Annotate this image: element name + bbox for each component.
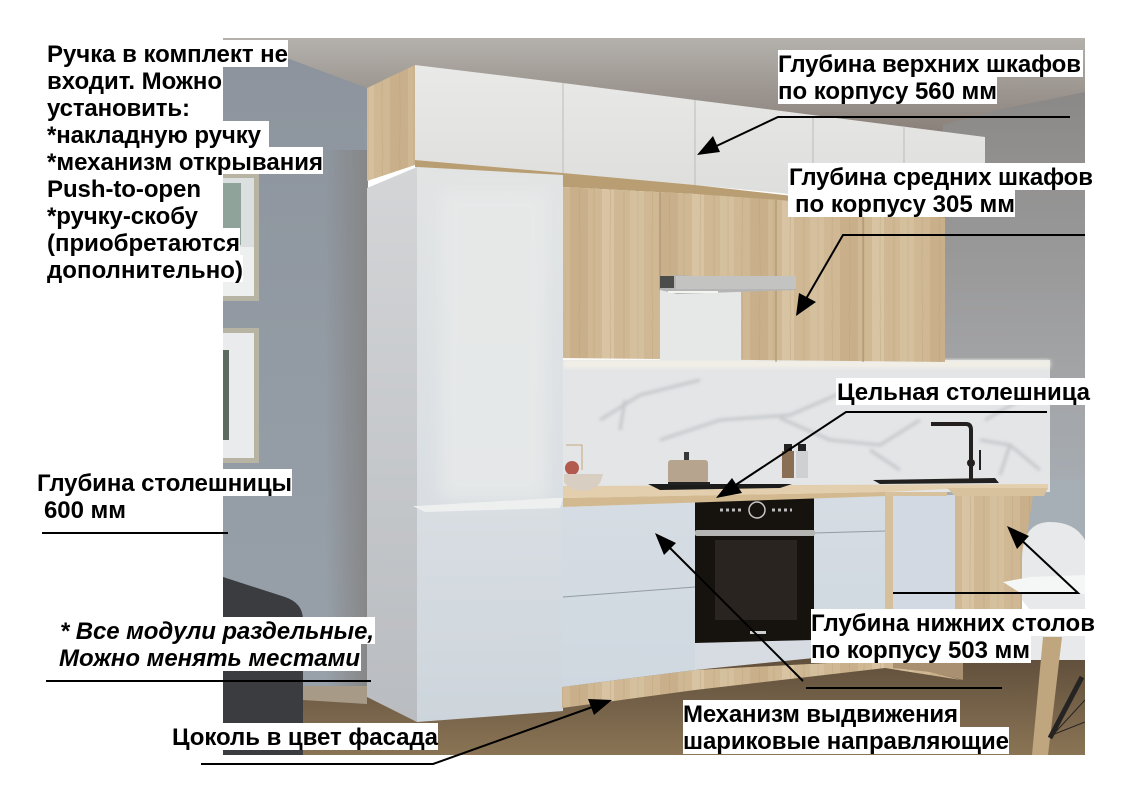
label: upper cabinets depth: по корпусу 560 мм — [778, 78, 997, 105]
label: worktop depth: Глубина столешницы — [37, 470, 292, 497]
wall corner shadow — [335, 150, 368, 686]
arrow: worktop — [716, 412, 1047, 498]
peninsula wood strip — [885, 492, 893, 610]
fridge side — [367, 167, 417, 722]
label: handle note: (приобретаются — [47, 230, 240, 257]
arrow: drawer runners — [655, 533, 1002, 688]
fridge front — [413, 167, 563, 722]
label: middle cabinets depth: по корпусу 305 мм — [795, 191, 1015, 218]
arrow: upper cabinets — [697, 117, 1070, 155]
oven — [695, 496, 815, 643]
hood recess with marble — [660, 288, 741, 360]
line: worktop depth — [42, 532, 228, 534]
cooker hood — [660, 275, 796, 294]
label: lower tables depth: по корпусу 503 мм — [811, 637, 1030, 664]
sink — [873, 478, 999, 484]
label: drawer runners — [683, 700, 1009, 755]
label: lower tables depth: Глубина нижних столов — [811, 610, 1095, 637]
label: solid worktop: Цельная столешница — [837, 379, 1091, 406]
peninsula base — [893, 663, 963, 680]
label: middle cabinets depth: Глубина средних шкафов — [789, 164, 1093, 191]
arrow: plinth — [201, 699, 612, 764]
label: handle note: установить: — [47, 95, 190, 122]
label: handle note: дополнительно) — [47, 257, 243, 284]
label: handle note: *механизм открывания — [47, 149, 323, 176]
label: upper cabinets depth: Глубина верхних шкафов — [778, 51, 1081, 78]
label: handle note: Push-to-open — [47, 176, 201, 203]
label: handle note: входит. Можно — [47, 68, 222, 95]
label: handle note — [47, 40, 323, 284]
left wall — [223, 48, 367, 702]
cooktop — [648, 484, 792, 490]
wood side of top unit — [367, 65, 415, 181]
label: worktop depth: 600 мм — [44, 497, 126, 524]
lower right wall — [1030, 480, 1085, 660]
pot — [668, 452, 710, 485]
peninsula wood side — [955, 495, 1033, 610]
sofa — [223, 577, 303, 755]
label: modules note: Можно менять местами — [59, 645, 360, 672]
label: lower tables depth — [811, 609, 1095, 664]
picture frame lower — [223, 328, 259, 463]
lower plinth — [562, 660, 961, 708]
fruit bowl — [564, 445, 603, 491]
upper cabinets — [415, 65, 985, 194]
line: modules note — [46, 680, 371, 682]
ceiling — [223, 38, 1085, 132]
label: modules note: * Все модули раздельные, — [60, 618, 374, 645]
right wall — [943, 92, 1085, 540]
table top — [1003, 575, 1085, 594]
peninsula white panel — [893, 495, 955, 610]
label: handle note: *накладную ручку — [47, 122, 262, 149]
label: handle note: Ручка в комплект не — [47, 41, 288, 68]
label: handle note: *ручку-скобу — [47, 203, 199, 230]
wood strip under top units — [415, 160, 945, 220]
label: drawer runners: шариковые направляющие — [683, 728, 1009, 755]
label: drawer runners: Механизм выдвижения — [683, 701, 958, 728]
panel: kitchen photo scene — [223, 38, 1085, 755]
arrow: lower tables — [893, 526, 1078, 593]
black chair legs — [1050, 677, 1085, 738]
floor — [303, 658, 1085, 755]
label: worktop depth — [37, 469, 292, 524]
label: upper cabinets depth — [778, 50, 1083, 105]
backsplash marble — [563, 360, 1050, 492]
arrow: middle cabinets — [796, 235, 1085, 316]
picture frame upper — [223, 174, 259, 301]
faucet — [931, 424, 980, 480]
label: middle cabinets depth — [788, 163, 1094, 218]
worktop — [563, 484, 1048, 507]
label: modules note — [57, 617, 375, 672]
drawers under and right of the oven — [695, 492, 885, 670]
lower left drawers — [562, 502, 695, 687]
baseboard — [303, 686, 367, 704]
spice grinders — [782, 444, 808, 478]
table leg — [1032, 637, 1062, 755]
chair — [1022, 522, 1085, 660]
middle wood cabinets — [563, 187, 945, 362]
label: plinth: Цоколь в цвет фасада — [172, 724, 439, 751]
